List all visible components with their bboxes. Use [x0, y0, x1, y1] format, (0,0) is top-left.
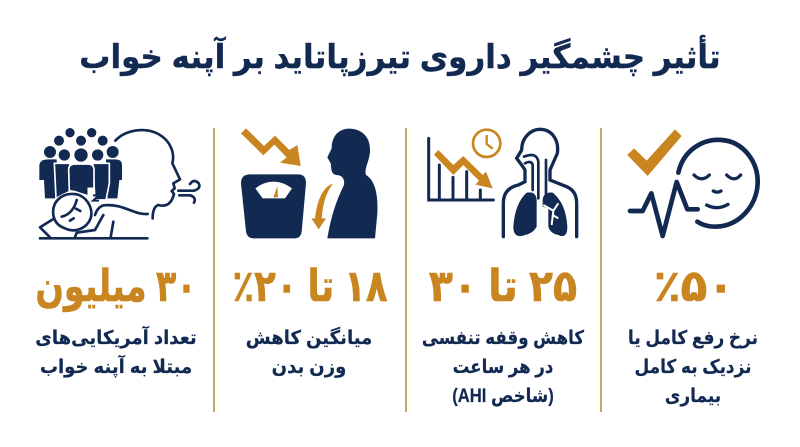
text: AHI reduction: کاهش وقفه تنفسی — [422, 328, 584, 349]
text: remission rate: نرخ رفع کامل یا — [628, 328, 758, 349]
stat: 30 million: ۳۰ میلیون — [35, 262, 197, 311]
text: remission rate: بیماری — [665, 386, 721, 407]
icon: chart, clock and lungs — [427, 128, 578, 238]
text: average weight loss — [246, 326, 372, 378]
icon: crowd and sleeper with airway — [38, 128, 201, 240]
icon: scale and silhouette — [241, 128, 378, 238]
text: remission rate: نزدیک به کامل — [635, 357, 751, 378]
text: Americans affected: تعداد آمریکایی‌های — [35, 328, 197, 349]
text: Americans affected: مبتلا به آپنه خواب — [40, 357, 192, 378]
text: AHI reduction: (شاخص AHI) — [452, 386, 554, 407]
text: average weight loss: وزن بدن — [272, 357, 346, 378]
stat: 18 to 20 percent: ۱۸ تا ۲۰٪ — [232, 262, 388, 311]
stat: 25 to 30: ۲۵ تا ۳۰ — [429, 262, 577, 311]
text: remission rate — [628, 328, 758, 407]
title: تأثیر چشمگیر داروی تیرزپاتاید بر آپنه خواب — [79, 38, 721, 75]
text: Americans affected — [35, 326, 197, 378]
icon: check, face and pulse — [627, 130, 760, 238]
stat: 50 percent: ٪۵۰ — [654, 262, 734, 311]
text: average weight loss: میانگین کاهش — [246, 328, 372, 349]
text: AHI reduction: در هر ساعت — [453, 357, 553, 378]
text: AHI reduction — [422, 328, 584, 407]
